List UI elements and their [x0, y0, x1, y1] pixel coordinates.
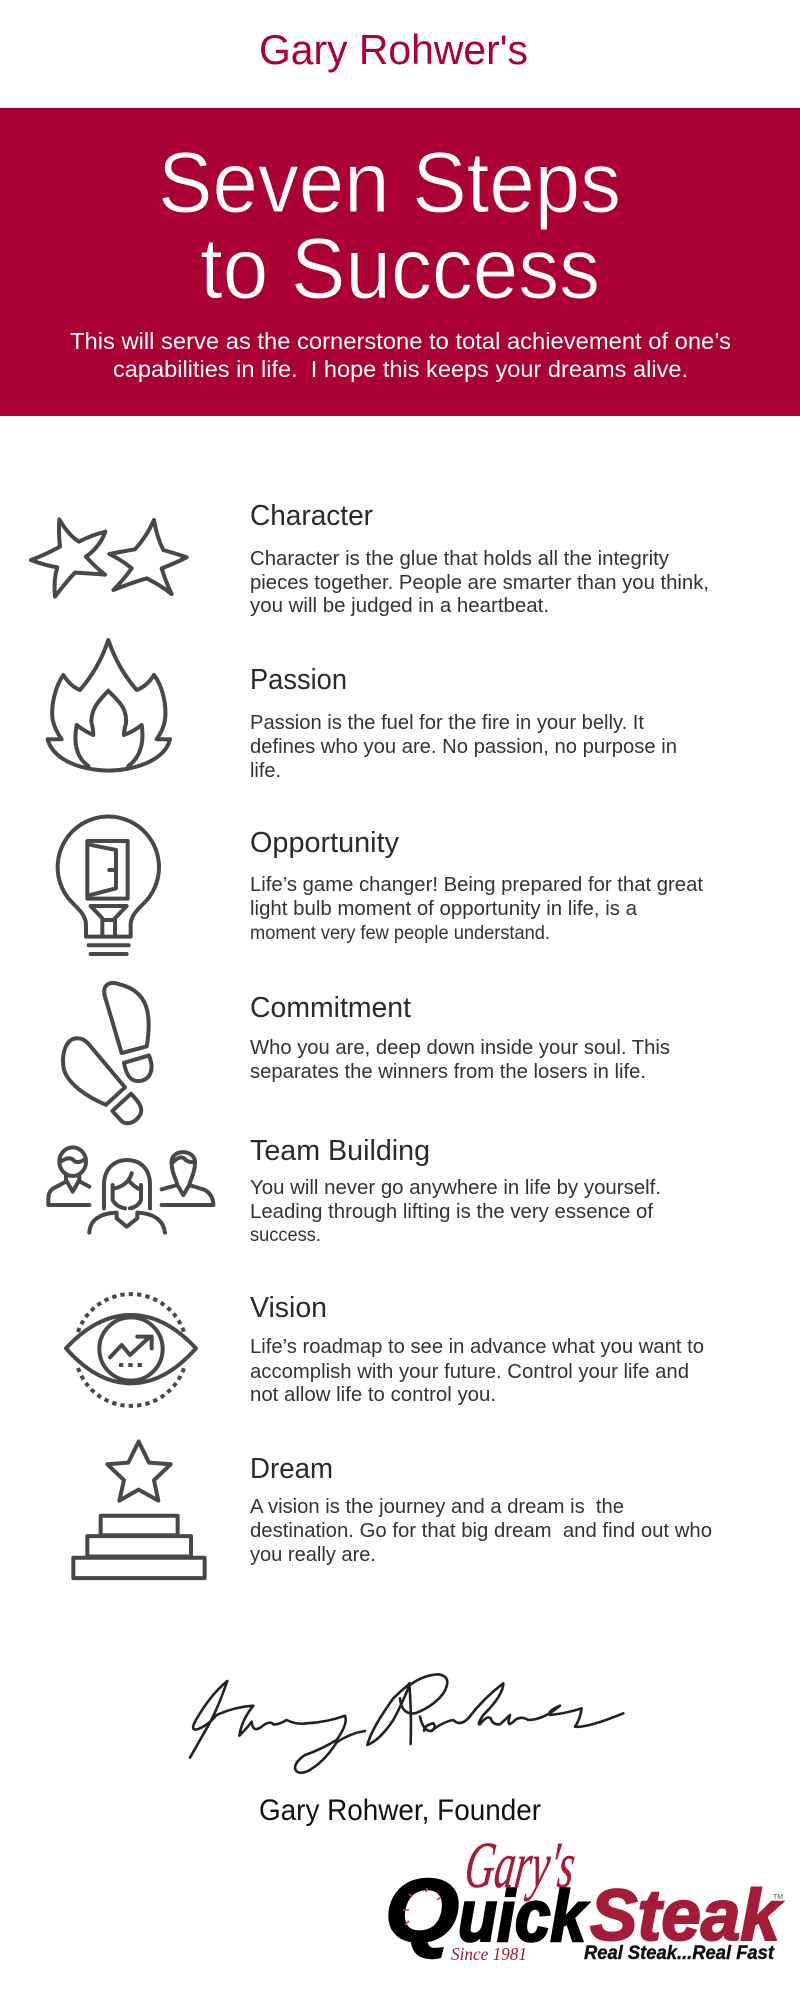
text: Passion: life.	[250, 760, 281, 782]
logo: Gary's QuickSteak: Gary's	[461, 1828, 579, 1901]
logo: Gary's QuickSteak: Steak	[590, 1876, 784, 1956]
text: Passion: Passion is the fuel for the fire in your belly. It	[250, 712, 644, 734]
text: Character: pieces together. People are smarter than you think,	[250, 572, 709, 594]
text: Passion: Passion	[250, 664, 347, 696]
text: Team Building: Leading through lifting is the very essence of	[250, 1201, 653, 1223]
text: Commitment	[250, 992, 670, 1083]
intro text: This will serve as the cornerstone to total achievement of one’s	[70, 328, 731, 354]
heading: Gary Rohwer's: Gary Rohwer's	[259, 26, 528, 73]
text: Opportunity: Opportunity	[250, 827, 399, 859]
logo: Gary's QuickSteak: uick	[458, 1877, 590, 1957]
text: Vision	[250, 1292, 704, 1406]
icon: two stars	[31, 519, 187, 597]
intro text	[70, 328, 731, 382]
text: Dream: destination. Go for that big dream and find out who	[250, 1520, 712, 1542]
logo: Gary's QuickSteak: Q	[385, 1862, 459, 1960]
text: Opportunity: light bulb moment of opportunity in life, is a	[250, 898, 638, 920]
intro text: capabilities in life. I hope this keeps your dreams alive.	[113, 356, 688, 382]
text: Commitment: Who you are, deep down inside your soul. This	[250, 1037, 670, 1059]
text: Character	[250, 500, 709, 617]
text: Character: you will be judged in a heartbeat.	[250, 595, 549, 617]
icon: footprints	[63, 983, 152, 1123]
text: Vision: not allow life to control you.	[250, 1384, 496, 1406]
text: Team Building	[250, 1135, 661, 1246]
text: Vision: Vision	[250, 1292, 327, 1324]
text: Character: Character	[250, 500, 373, 532]
text: Dream: Dream	[250, 1453, 333, 1485]
title: Seven Steps	[158, 135, 621, 231]
text: Commitment: Commitment	[250, 992, 411, 1024]
text: Opportunity: moment very few people understand.	[250, 922, 550, 944]
text: Dream: you really are.	[250, 1544, 376, 1566]
text: Commitment: separates the winners from the losers in life.	[250, 1061, 646, 1083]
text: Team Building: Team Building	[250, 1135, 430, 1167]
text: Passion: defines who you are. No passion, no purpose in	[250, 736, 677, 758]
text: Team Building: You will never go anywhere in life by yourself.	[250, 1177, 661, 1199]
icon: flame	[48, 640, 170, 771]
text: Vision: accomplish with your future. Control your life and	[250, 1361, 689, 1383]
icon: star above podium steps	[73, 1441, 205, 1578]
panel: title banner	[0, 108, 800, 416]
logo: Gary's QuickSteak: TM	[773, 1894, 783, 1901]
logo: Gary's QuickSteak	[385, 1828, 784, 1964]
text: Passion	[250, 664, 677, 782]
title	[158, 135, 621, 317]
text: Vision: Life’s roadmap to see in advance what you want to	[250, 1336, 704, 1358]
text: Team Building: success.	[250, 1225, 321, 1246]
icon: light bulb with door	[58, 817, 159, 954]
signature	[190, 1674, 623, 1773]
icon: team of three people	[48, 1147, 213, 1233]
text: Dream	[250, 1453, 712, 1566]
text: Opportunity	[250, 827, 703, 944]
text: Character: Character is the glue that holds all the integrity	[250, 548, 669, 570]
text: Dream: A vision is the journey and a dream is the	[250, 1496, 624, 1518]
text: signer name: Gary Rohwer, Founder	[259, 1794, 541, 1827]
text: Opportunity: Life’s game changer! Being prepared for that great	[250, 874, 703, 896]
logo: Gary's QuickSteak: Since 1981	[451, 1944, 527, 1964]
logo: Gary's QuickSteak: Real Steak...Real Fast	[584, 1943, 775, 1964]
title: to Success	[200, 221, 600, 317]
icon: eye with growth chart	[66, 1294, 196, 1406]
